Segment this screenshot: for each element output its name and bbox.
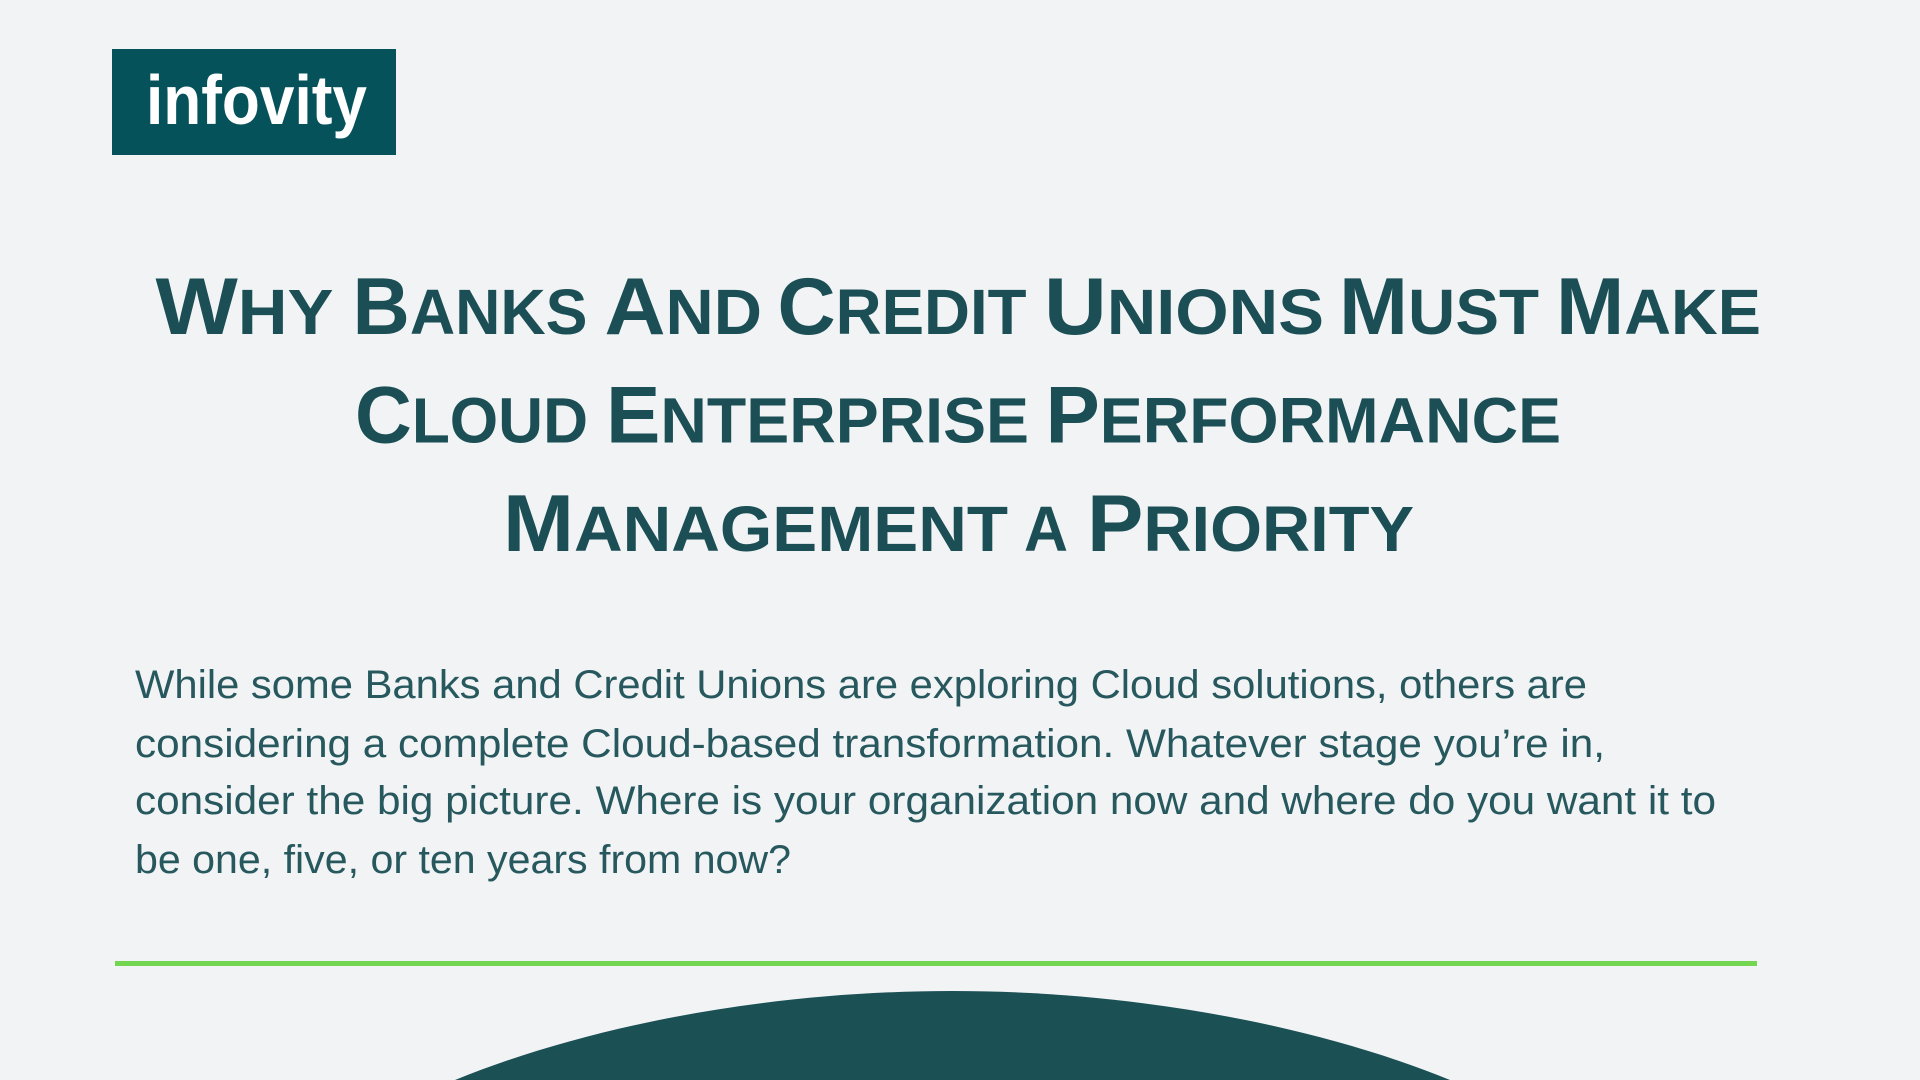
intro paragraph: While some Banks and Credit Unions are exploring Cloud solutions, others are bbox=[135, 663, 1587, 707]
title: MUST bbox=[1339, 262, 1539, 352]
title: MANAGEMENT bbox=[503, 479, 1008, 569]
logo: infovity bbox=[112, 49, 396, 155]
title: CLOUD bbox=[355, 370, 588, 460]
intro paragraph: consider the big picture. Where is your organization now and where do you want it to bbox=[135, 779, 1716, 823]
title bbox=[156, 262, 1761, 569]
title: AND bbox=[604, 262, 762, 352]
divider line bbox=[115, 961, 1757, 966]
title: MAKE bbox=[1556, 262, 1761, 352]
title: PERFORMANCE bbox=[1046, 370, 1561, 460]
dark green arc shape bbox=[455, 991, 1450, 1080]
title: CREDIT bbox=[778, 262, 1026, 352]
title: A bbox=[1024, 493, 1068, 565]
title: UNIONS bbox=[1044, 262, 1324, 352]
intro paragraph: be one, five, or ten years from now? bbox=[135, 838, 791, 882]
title: WHY bbox=[156, 262, 334, 352]
title: ENTERPRISE bbox=[606, 370, 1029, 460]
intro paragraph: considering a complete Cloud-based transformation. Whatever stage you’re in, bbox=[135, 722, 1605, 766]
logo: infovity: infovity bbox=[146, 61, 367, 139]
intro paragraph bbox=[135, 663, 1716, 882]
title: PRIORITY bbox=[1087, 479, 1414, 569]
title: BANKS bbox=[352, 262, 588, 352]
